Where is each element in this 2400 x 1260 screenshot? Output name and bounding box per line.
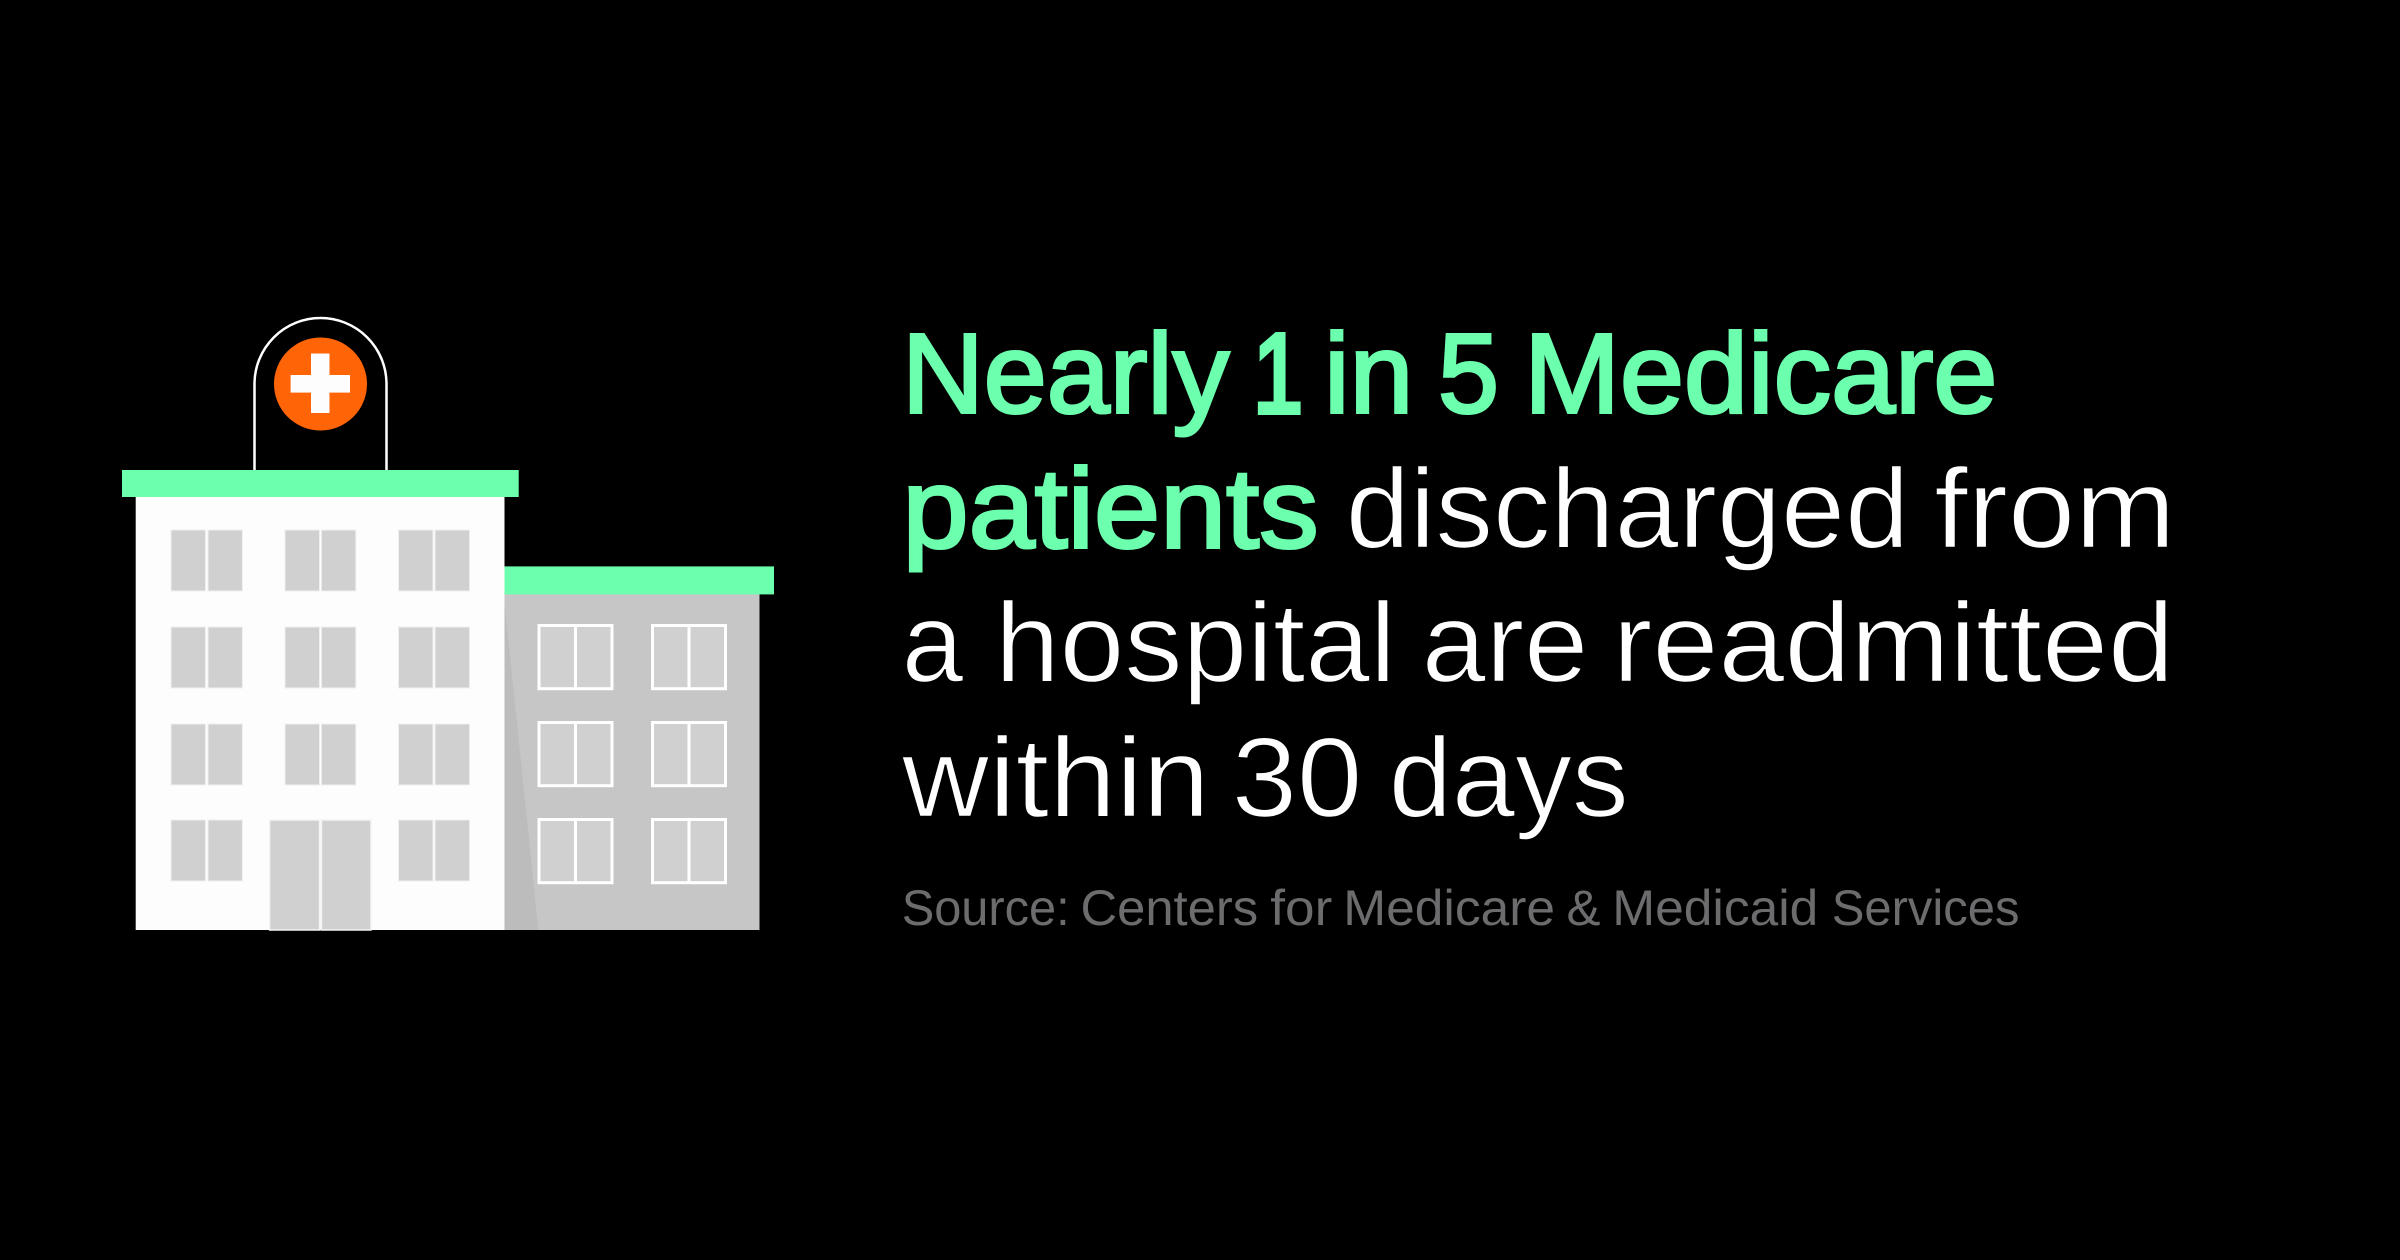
headline line 3: hospital [995, 580, 1396, 706]
entrance door [270, 820, 371, 930]
arch sign outline [254, 318, 386, 470]
headline line 3 [902, 580, 2174, 706]
source note: & [1566, 880, 1600, 936]
source note: Medicaid [1612, 880, 1818, 936]
headline line 4: days [1389, 715, 1629, 841]
headline line 1: 5 [1438, 311, 1499, 437]
main building: white tower [122, 470, 519, 930]
headline line 2 remainder [1346, 446, 2176, 572]
source note: Centers [1080, 880, 1258, 936]
headline line 2 remainder: from [1934, 446, 2176, 572]
source note: Services [1832, 880, 2020, 936]
headline line 4 [901, 715, 1629, 841]
headline line 1: Nearly [902, 311, 1230, 437]
headline line 1: in [1324, 311, 1413, 437]
headline line 4: 30 [1232, 715, 1362, 841]
source note [902, 880, 2020, 936]
headline line 1: 1 [1253, 311, 1303, 437]
headline line 3: readmitted [1613, 580, 2174, 706]
source note: Medicare [1343, 880, 1555, 936]
headline [901, 311, 2176, 841]
source note: for [1270, 880, 1332, 936]
headline line 1 [902, 311, 1997, 437]
headline line 3: are [1422, 580, 1588, 706]
headline line 2 remainder: discharged [1346, 446, 1909, 572]
headline line 1: Medicare [1524, 311, 1997, 437]
headline line 3: a [902, 580, 963, 706]
side wing: grey building [504, 566, 774, 930]
source note: Source: [902, 880, 1070, 936]
illustration: hospital [122, 318, 774, 930]
headline line 2 highlight: patients [902, 446, 1319, 572]
headline line 4: within [901, 715, 1210, 841]
icon: orange circle with medical cross [274, 338, 367, 430]
